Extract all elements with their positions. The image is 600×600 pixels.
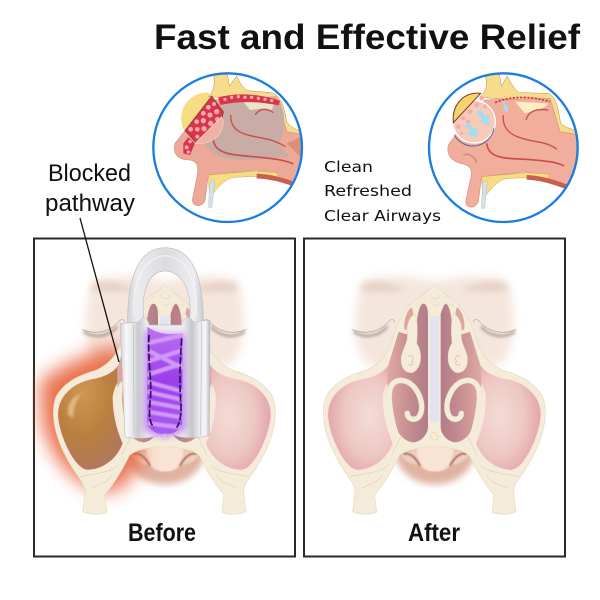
- flesh: [448, 98, 580, 207]
- benefit list: Clean: [324, 158, 373, 176]
- sinus illustration with inflammation: [40, 248, 275, 514]
- benefit list: [324, 158, 441, 225]
- turbinates: [231, 109, 286, 147]
- device: purple light core: [144, 327, 186, 436]
- benefit list: Clear Airways: [324, 207, 441, 225]
- magnifier lens: [453, 100, 495, 143]
- circle ring: [153, 73, 302, 222]
- flesh: [174, 97, 307, 206]
- arrows: [476, 109, 489, 126]
- lens: [195, 117, 223, 144]
- pointer line: [80, 218, 119, 362]
- frontal sinus: [181, 93, 212, 132]
- label: blocked pathway: [45, 160, 135, 217]
- palate: [208, 171, 278, 194]
- drip: [209, 180, 215, 207]
- grey swollen cavity: [203, 102, 290, 160]
- sinus illustration: [323, 276, 545, 514]
- label: before: Before: [128, 519, 196, 547]
- device: body: [120, 317, 210, 438]
- title: Fast and Effective Relief: [154, 18, 580, 57]
- upper bone: [208, 74, 300, 134]
- device: arch: [128, 248, 203, 327]
- label: blocked pathway: pathway: [45, 190, 135, 217]
- diagram: blocked nasal cavity: [153, 73, 307, 222]
- panel: before: [34, 238, 295, 556]
- label: after: After: [408, 519, 460, 547]
- label: blocked pathway: Blocked: [48, 160, 131, 187]
- diagram: cleared nasal cavity: [429, 73, 580, 222]
- turbinate lines: [503, 110, 557, 149]
- benefit list: Refreshed: [324, 182, 412, 200]
- panel: after: [304, 238, 565, 556]
- inflamed mucosa: [218, 94, 280, 105]
